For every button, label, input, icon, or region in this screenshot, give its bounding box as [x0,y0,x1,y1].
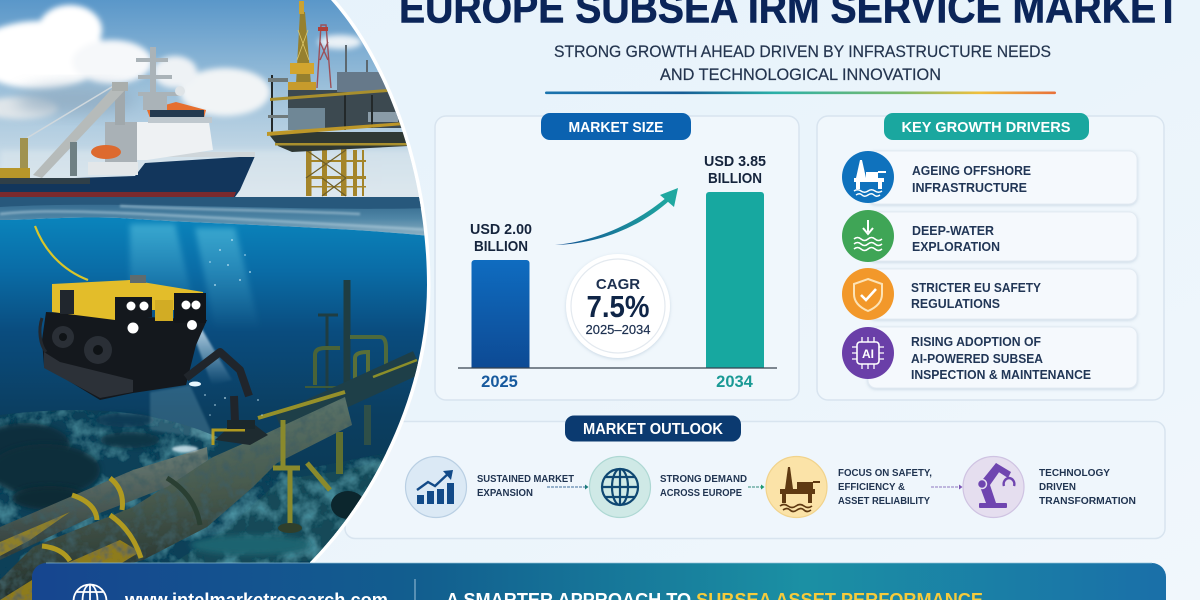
label: EXPLORATION [912,239,1000,254]
arrow: step 2 to 3 [748,484,764,490]
icon: globe [590,456,650,518]
icon: growth chart [406,456,466,518]
label: STRICTER EU SAFETY [911,280,1041,295]
label: AI-POWERED SUBSEA [911,351,1044,366]
CAGR badge: 2025–2034 [586,322,650,337]
label: AGEING OFFSHORE [912,163,1031,178]
label: EXPANSION [477,487,533,499]
heading: market outlook [565,416,741,442]
axis label: 2025: 2025 [481,373,518,391]
heading: market size: MARKET SIZE [568,119,664,136]
icon: globe [74,584,106,600]
label: STRONG DEMAND [660,473,747,485]
icon: robot arm [963,456,1024,518]
label: TRANSFORMATION [1039,495,1136,507]
heading: key growth drivers: KEY GROWTH DRIVERS [902,119,1070,136]
label: INSPECTION & MAINTENANCE [911,367,1091,382]
step 2: strong demand across europe [590,456,747,518]
panel: key growth drivers [817,113,1164,400]
arrow: step 1 to 2 [547,484,588,490]
icon: water depth [842,210,894,262]
pipelines [0,392,352,600]
seabed [0,410,386,580]
panel: market size [435,113,799,400]
driver: rising adoption of AI [842,327,1137,388]
label: DRIVEN [1039,481,1076,493]
driver: ageing offshore infrastructure [842,151,1137,204]
CAGR badge: CAGR [596,276,640,293]
subtitle: STRONG GROWTH AHEAD DRIVEN BY INFRASTRUCTURE NEEDS [554,42,1051,61]
ROV [40,275,255,429]
heading: market outlook: MARKET OUTLOOK [583,421,724,438]
title rule [545,92,1056,94]
icon: AI chip [842,327,894,379]
sea surface band [0,197,430,236]
ROV light beams [150,328,231,440]
bar: 2034 [706,192,764,368]
light rays [128,222,253,315]
value: 2034: BILLION [708,170,762,187]
value: 2025: USD 2.00 [470,221,532,238]
icon: oil platform [766,456,827,518]
manipulator arm [186,352,249,422]
label: REGULATIONS [911,296,1000,311]
bubbles near arm [204,239,263,416]
driver: stricter EU safety regulations [842,268,1137,320]
label: EFFICIENCY & [838,481,905,493]
step 4: technology driven transformation [963,456,1136,518]
label: FOCUS ON SAFETY, [838,467,932,479]
footer banner [32,563,1166,600]
heading: key growth drivers [884,113,1089,140]
driver: deep-water exploration [842,210,1137,262]
label: SUSTAINED MARKET [477,473,575,485]
wellhead and riser structure [305,280,386,400]
label: TECHNOLOGY [1039,467,1110,479]
icon: safety shield [842,268,894,320]
ship [0,47,255,197]
label: ACROSS EUROPE [660,487,742,499]
CAGR badge: 7.5% [586,289,650,324]
photo: vessel, platform and subsea ROV on pipeline [0,0,430,600]
value: 2025: BILLION [474,238,528,255]
growth arrow [555,188,678,245]
panel: market outlook [345,416,1165,538]
icon: AI chip: AI [862,347,874,361]
offshore platform [267,1,408,196]
subtitle: AND TECHNOLOGICAL INNOVATION [660,65,941,84]
tether [35,226,88,280]
step 1: sustained market expansion [406,456,575,518]
icon: oil rig [842,151,894,203]
underwater [0,218,427,562]
label: RISING ADOPTION OF [911,334,1041,349]
heading: market size [541,113,691,140]
arrow: step 3 to 4 [931,484,962,490]
bright spot on pipe [172,446,198,452]
CAGR badge [566,254,670,358]
label: ASSET RELIABILITY [838,495,930,507]
label: DEEP-WATER [912,223,995,238]
clouds [0,5,362,119]
value: 2034: USD 3.85 [704,153,766,170]
bar: 2025 [472,260,530,368]
axis label: 2034: 2034 [716,373,754,391]
bar chart [458,153,777,391]
step 3: focus on safety [766,456,932,518]
label: INFRASTRUCTURE [912,180,1027,195]
